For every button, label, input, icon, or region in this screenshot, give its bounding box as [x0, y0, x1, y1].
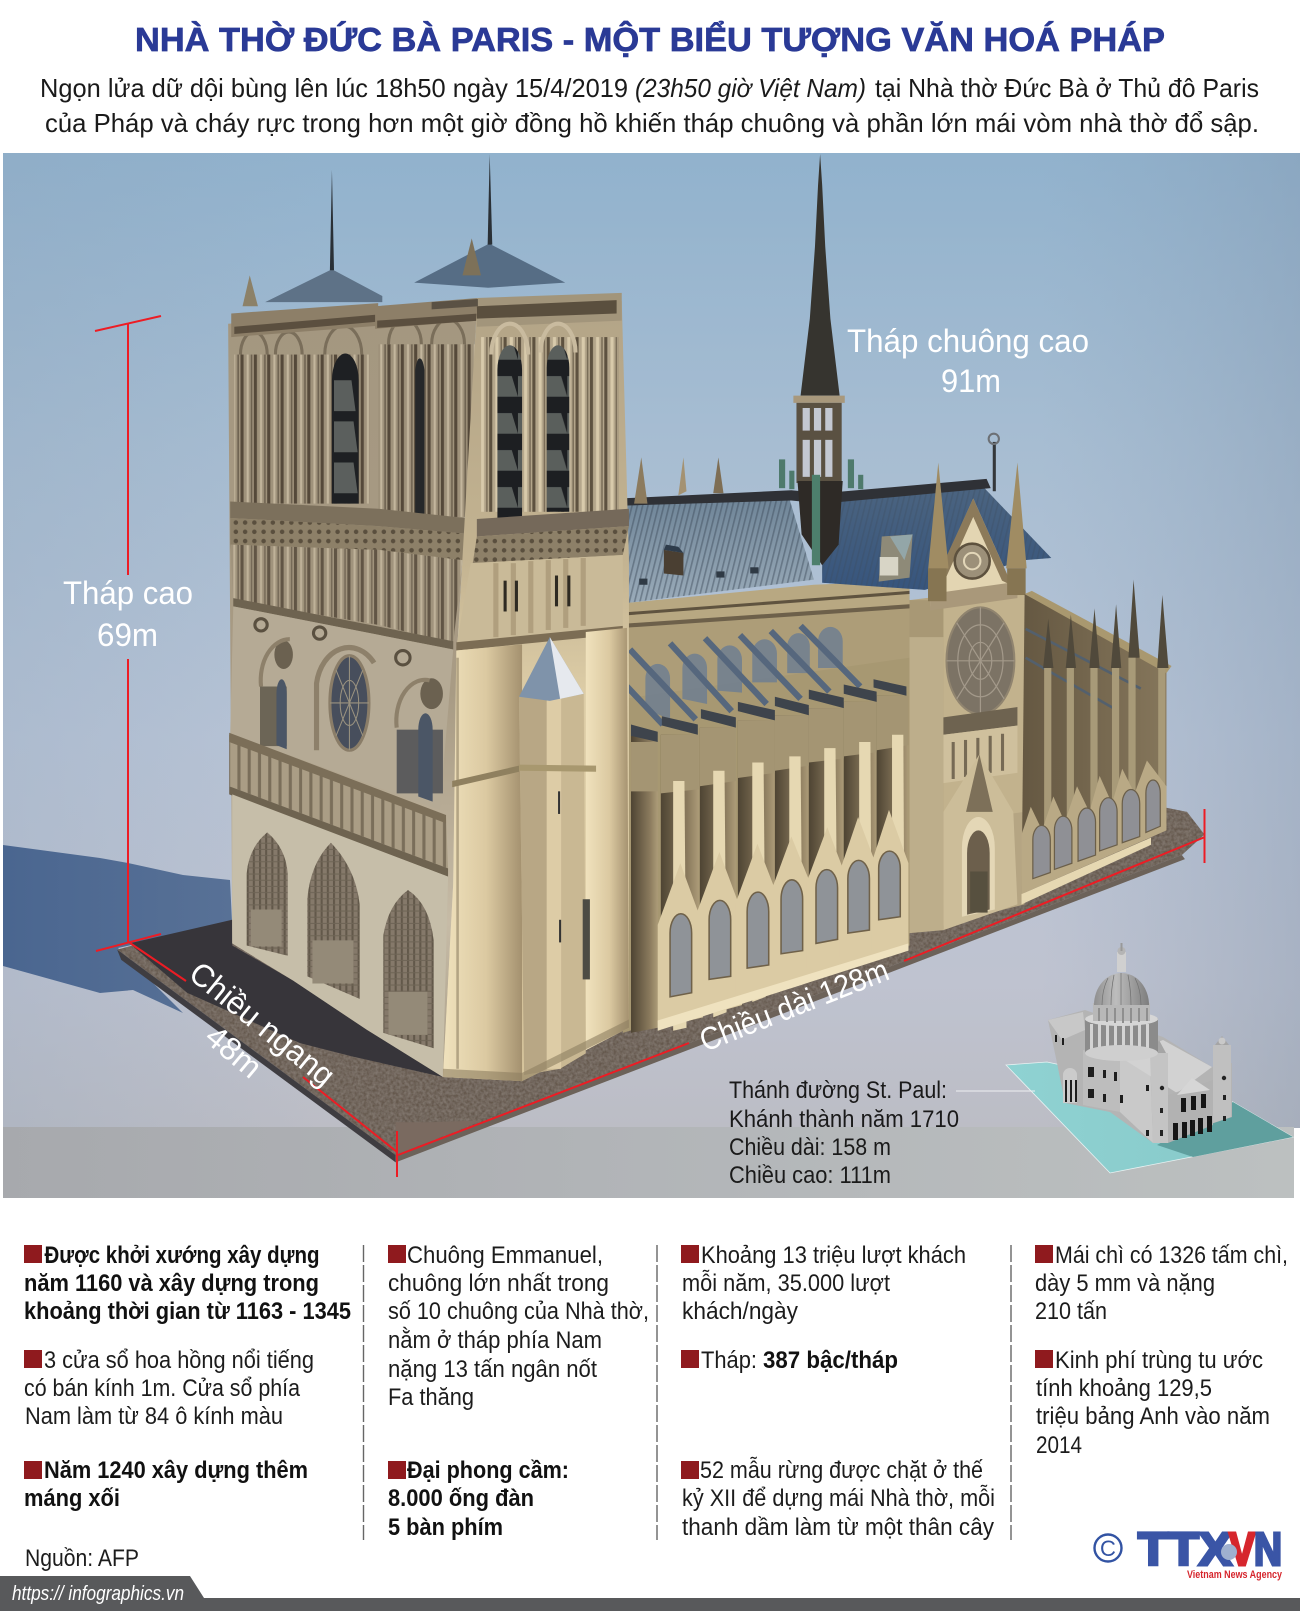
- towers: [1150, 1053, 1168, 1143]
- lantern: [1117, 952, 1126, 972]
- column 2 facts: 5 bàn phím: [388, 1514, 503, 1541]
- column 3 facts: [681, 1242, 995, 1541]
- column 2 facts: nặng 13 tấn ngân nốt: [388, 1356, 597, 1383]
- column 4 facts: Kinh phí trùng tu ước: [1055, 1347, 1263, 1374]
- turret cap: [519, 637, 584, 701]
- right tower belfry west: [375, 298, 479, 517]
- side windows: [260, 687, 287, 746]
- upper tan tier: [456, 555, 623, 646]
- gallery band: [230, 502, 475, 534]
- small pinnacles: [634, 457, 647, 504]
- stair turret: [519, 694, 586, 1075]
- belfry columns: [481, 337, 619, 512]
- teal shadow: [1157, 1102, 1293, 1157]
- portico dome: [1063, 1068, 1077, 1103]
- column 2 facts: số 10 chuông của Nhà thờ,: [388, 1298, 649, 1325]
- logo: TTXVN: [1094, 1523, 1283, 1581]
- label: tower height: [63, 575, 193, 653]
- west façade: [228, 298, 479, 1077]
- column 1 facts: Được khởi xướng xây dựng: [44, 1242, 320, 1269]
- gallery: [477, 509, 629, 536]
- transept roof: [822, 486, 1051, 590]
- St. Paul's Cathedral model: [1006, 943, 1293, 1173]
- green statues: [779, 459, 863, 489]
- tracery bands: [943, 707, 1017, 735]
- intro paragraph: (23h50 giờ Việt Nam): [635, 73, 866, 103]
- column 1 facts: năm 1160 và xây dựng trong: [24, 1270, 319, 1297]
- footer bar: https:// infographics.vn: [12, 1583, 184, 1605]
- quatrefoils: [255, 619, 410, 665]
- column 2 facts: chuông lớn nhất trong: [388, 1270, 609, 1297]
- left tower belfry: [231, 303, 378, 504]
- body: [1048, 1010, 1232, 1143]
- source: Nguồn: AFP: [25, 1545, 139, 1572]
- balcony: [229, 735, 448, 868]
- column 3 facts: thanh dầm làm từ một thân cây: [682, 1514, 994, 1541]
- cathedral model: [117, 154, 1204, 1162]
- intro paragraph: Ngọn lửa dữ dội bùng lên lúc 18h50 ngày 15/4/2019: [40, 73, 628, 103]
- column 2 facts: [388, 1242, 649, 1541]
- red dimension lines: [95, 316, 1205, 1177]
- column 4 facts: 2014: [1036, 1432, 1082, 1459]
- flèche spire: [793, 154, 845, 565]
- column 4 facts: triệu bảng Anh vào năm: [1036, 1403, 1270, 1430]
- cornice: [477, 293, 622, 327]
- intro paragraph: của Pháp và cháy rực trong hơn một giờ đồng hồ khiến tháp chuông và phần lớn mái vòm nhà thờ đổ sập.: [45, 108, 1259, 138]
- chapel gables: [658, 810, 908, 1028]
- pinnacles: [928, 462, 949, 570]
- label: tower height: 69m: [97, 617, 158, 653]
- dome: [1094, 973, 1149, 1005]
- ridge crest: [621, 457, 991, 506]
- label: tower height: Tháp cao: [63, 575, 193, 611]
- label: spire height: [847, 323, 1089, 399]
- label: length: Chiều dài 128m: [694, 952, 894, 1059]
- label: spire height: 91m: [941, 363, 1001, 399]
- nave buttresses and chapels: [631, 679, 908, 1033]
- left wing roof: [1048, 1012, 1085, 1040]
- column 3 facts: mỗi năm, 35.000 lượt: [682, 1270, 890, 1297]
- intro paragraph: [40, 73, 1259, 138]
- column 1 facts: máng xối: [24, 1485, 120, 1512]
- column 2 facts: nằm ở tháp phía Nam: [388, 1327, 602, 1354]
- St. Paul's callout: Chiều cao: 111m: [729, 1162, 891, 1189]
- apse flying buttress lines: [1026, 629, 1141, 709]
- column 3 facts: 52 mẫu rừng được chặt ở thế: [700, 1457, 984, 1484]
- apse pillars: [1044, 658, 1165, 853]
- St. Paul's callout: Khánh thành năm 1710: [729, 1106, 959, 1133]
- St. Paul's callout: Chiều dài: 158 m: [729, 1134, 891, 1161]
- column 2 facts: Fa thăng: [388, 1384, 474, 1411]
- footer bar: [0, 1576, 1300, 1611]
- portals: [247, 832, 434, 1048]
- stone plaza: [117, 807, 1204, 1162]
- middle block: [1083, 1050, 1120, 1112]
- logo: TTXVN: V: [1229, 1523, 1255, 1575]
- column 2 facts: 8.000 ống đàn: [388, 1485, 534, 1512]
- portico columns: [1173, 1094, 1212, 1140]
- apse chapels: [1022, 760, 1166, 894]
- column 3 facts: khách/ngày: [682, 1298, 798, 1325]
- portal: [943, 754, 1017, 930]
- buttress gaps: [631, 696, 908, 1033]
- column 4 facts: tính khoảng 129,5: [1036, 1375, 1212, 1402]
- apse: [1022, 580, 1172, 904]
- dormer: [879, 534, 913, 582]
- south face of tower: [432, 293, 629, 1081]
- upper gable: [930, 498, 1012, 606]
- intro paragraph: tại Nhà thờ Đức Bà ở Thủ đô Paris: [875, 73, 1259, 103]
- teal base: [1006, 1062, 1293, 1173]
- column 4 facts: [1035, 1242, 1288, 1459]
- stone bands: [452, 766, 519, 787]
- column 3 facts: Khoảng 13 triệu lượt khách: [701, 1242, 966, 1269]
- drum: [1085, 1018, 1158, 1053]
- roof of nave: [623, 498, 814, 603]
- lower wall: [232, 794, 448, 1077]
- nave wall and flying buttresses: [623, 581, 910, 1033]
- logo: TTXVN: C: [1100, 1536, 1116, 1561]
- logo: TTXVN: TTX: [1138, 1523, 1232, 1575]
- column 2 facts: Chuông Emmanuel,: [407, 1242, 603, 1269]
- rose window west: [330, 656, 369, 750]
- column 3 facts: 387 bậc/tháp: [763, 1347, 898, 1374]
- front wall: [1168, 1080, 1213, 1143]
- column 1 facts: có bán kính 1m. Cửa sổ phía: [24, 1375, 301, 1402]
- rose window south: [947, 607, 1014, 714]
- ground shadow: [3, 845, 232, 1013]
- dark caps: [631, 679, 906, 742]
- chapel windows: [670, 851, 900, 997]
- mid wall: [230, 606, 453, 810]
- column 1 facts: Nam làm từ 84 ô kính màu: [25, 1403, 283, 1430]
- column 3 facts: kỷ XII để dựng mái Nhà thờ, mỗi: [682, 1485, 995, 1512]
- buttress blocks: [631, 696, 908, 793]
- panel: cathedral illustration: [3, 153, 1300, 1198]
- light pillar edges: [673, 735, 904, 1031]
- St. Paul's callout: Thánh đường St. Paul:: [729, 1077, 947, 1104]
- label: width: Chiều ngang: [183, 954, 342, 1093]
- logo: TTXVN: N: [1254, 1523, 1282, 1575]
- belfry openings: [491, 324, 576, 519]
- nave balustrade: [623, 581, 910, 628]
- title: NHÀ THỜ ĐỨC BÀ PARIS - MỘT BIỂU TƯỢNG VĂN HOÁ PHÁP: [135, 20, 1165, 58]
- label: width: 48m: [199, 1018, 269, 1085]
- apse spires: [1043, 580, 1168, 668]
- column 3 facts: Tháp:: [701, 1347, 757, 1374]
- transept: [910, 434, 1027, 933]
- column 1 facts: [24, 1242, 351, 1512]
- background sky: [3, 153, 1300, 1198]
- chapel base: [658, 943, 908, 1031]
- column 1 facts: 3 cửa sổ hoa hồng nổi tiếng: [44, 1347, 314, 1374]
- column 4 facts: 210 tấn: [1035, 1298, 1107, 1325]
- tower roofs and spires: [243, 154, 565, 306]
- column 1 facts: Năm 1240 xây dựng thêm: [44, 1457, 308, 1484]
- lower column tier: [230, 545, 462, 643]
- front roof: [1120, 1040, 1212, 1093]
- column 4 facts: dày 5 mm và nặng: [1035, 1270, 1215, 1297]
- corner buttresses: [443, 644, 522, 1081]
- label: spire height: Tháp chuông cao: [847, 323, 1089, 359]
- St. Paul's callout: [729, 1077, 1035, 1189]
- column 2 facts: Đại phong cầm:: [407, 1457, 569, 1484]
- column 1 facts: khoảng thời gian từ 1163 - 1345: [24, 1298, 351, 1325]
